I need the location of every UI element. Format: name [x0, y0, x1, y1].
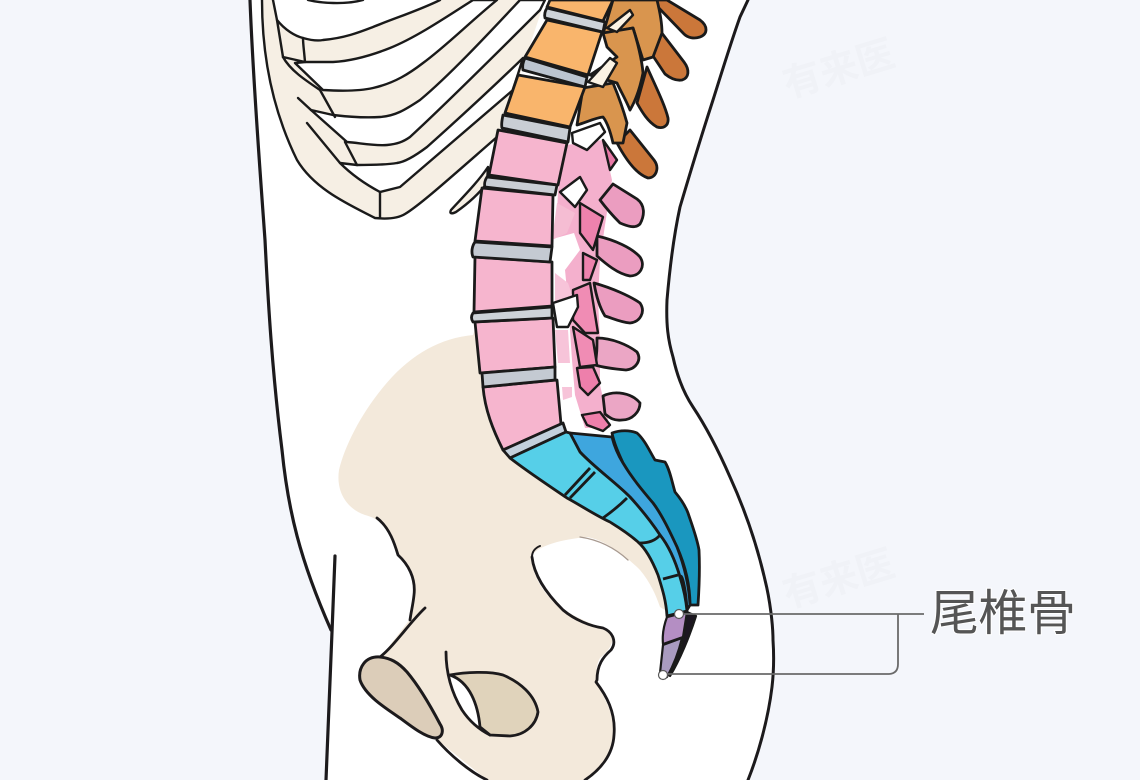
intervertebral discs: [545, 8, 605, 32]
obturator opening: [450, 675, 480, 727]
callout label: 尾椎骨: [930, 587, 1076, 641]
rib 1 top edge: [273, 0, 440, 40]
sacral dividers: [565, 468, 678, 579]
pelvis: [338, 323, 668, 780]
body outline: [250, 0, 774, 780]
watermarks on background: [778, 33, 900, 617]
floating rib: [450, 167, 488, 213]
callout dots: [658, 610, 684, 680]
coccyx lower segment: [660, 638, 682, 677]
rib 3 cartilage line: [345, 142, 357, 165]
gap between ribs 1 and 2: [295, 0, 497, 91]
gap between ribs 2 and 3: [311, 0, 545, 145]
acetabulum shade left: [360, 657, 442, 738]
gap between rib 3 and lower rib: [340, 58, 523, 192]
lumbar vertebrae: [489, 130, 567, 185]
spinous lumbar: [600, 184, 643, 227]
sacral posterior crest: [612, 431, 699, 605]
acetabulum shade right: [450, 672, 538, 736]
iliac bone: [338, 323, 668, 780]
rib cage: [262, 0, 545, 219]
callout leader lines: [664, 614, 924, 674]
lumbar posterior elements: [594, 184, 643, 420]
thoracic posterior elements: [577, 0, 706, 178]
coccyx: [660, 612, 696, 677]
coccyx upper segment: [663, 612, 687, 644]
outer cage edge: [262, 0, 497, 219]
obturator outline: [446, 652, 490, 735]
sacrum: [510, 431, 699, 616]
vertebral bodies: [472, 0, 613, 458]
pelvis outline: [377, 518, 628, 780]
cage beige fill: [262, 0, 545, 219]
coccyx dark edge: [670, 612, 696, 676]
spinous processes: [655, 0, 706, 38]
rib 2 cartilage tip: [298, 98, 311, 110]
gap above rib 1: [273, 0, 440, 40]
costal inner line: [277, 20, 335, 117]
white intervertebral facets: [553, 10, 633, 382]
top rib arc: [308, 0, 363, 3]
pedicles: [603, 0, 662, 60]
lower cartilage line: [307, 123, 340, 163]
sacral canal: [570, 433, 690, 610]
watermarks on background: 有来医: [778, 33, 900, 107]
rib 1 cartilage line: [283, 38, 305, 62]
sacral segments: [510, 432, 687, 616]
body silhouette: [250, 0, 774, 780]
lamina and facets: [552, 140, 617, 431]
watermarks on background: 有来医: [778, 543, 900, 617]
sternum line: [379, 192, 381, 218]
thoracic vertebrae: [547, 0, 613, 21]
lumbar posterior backing: [556, 140, 612, 428]
